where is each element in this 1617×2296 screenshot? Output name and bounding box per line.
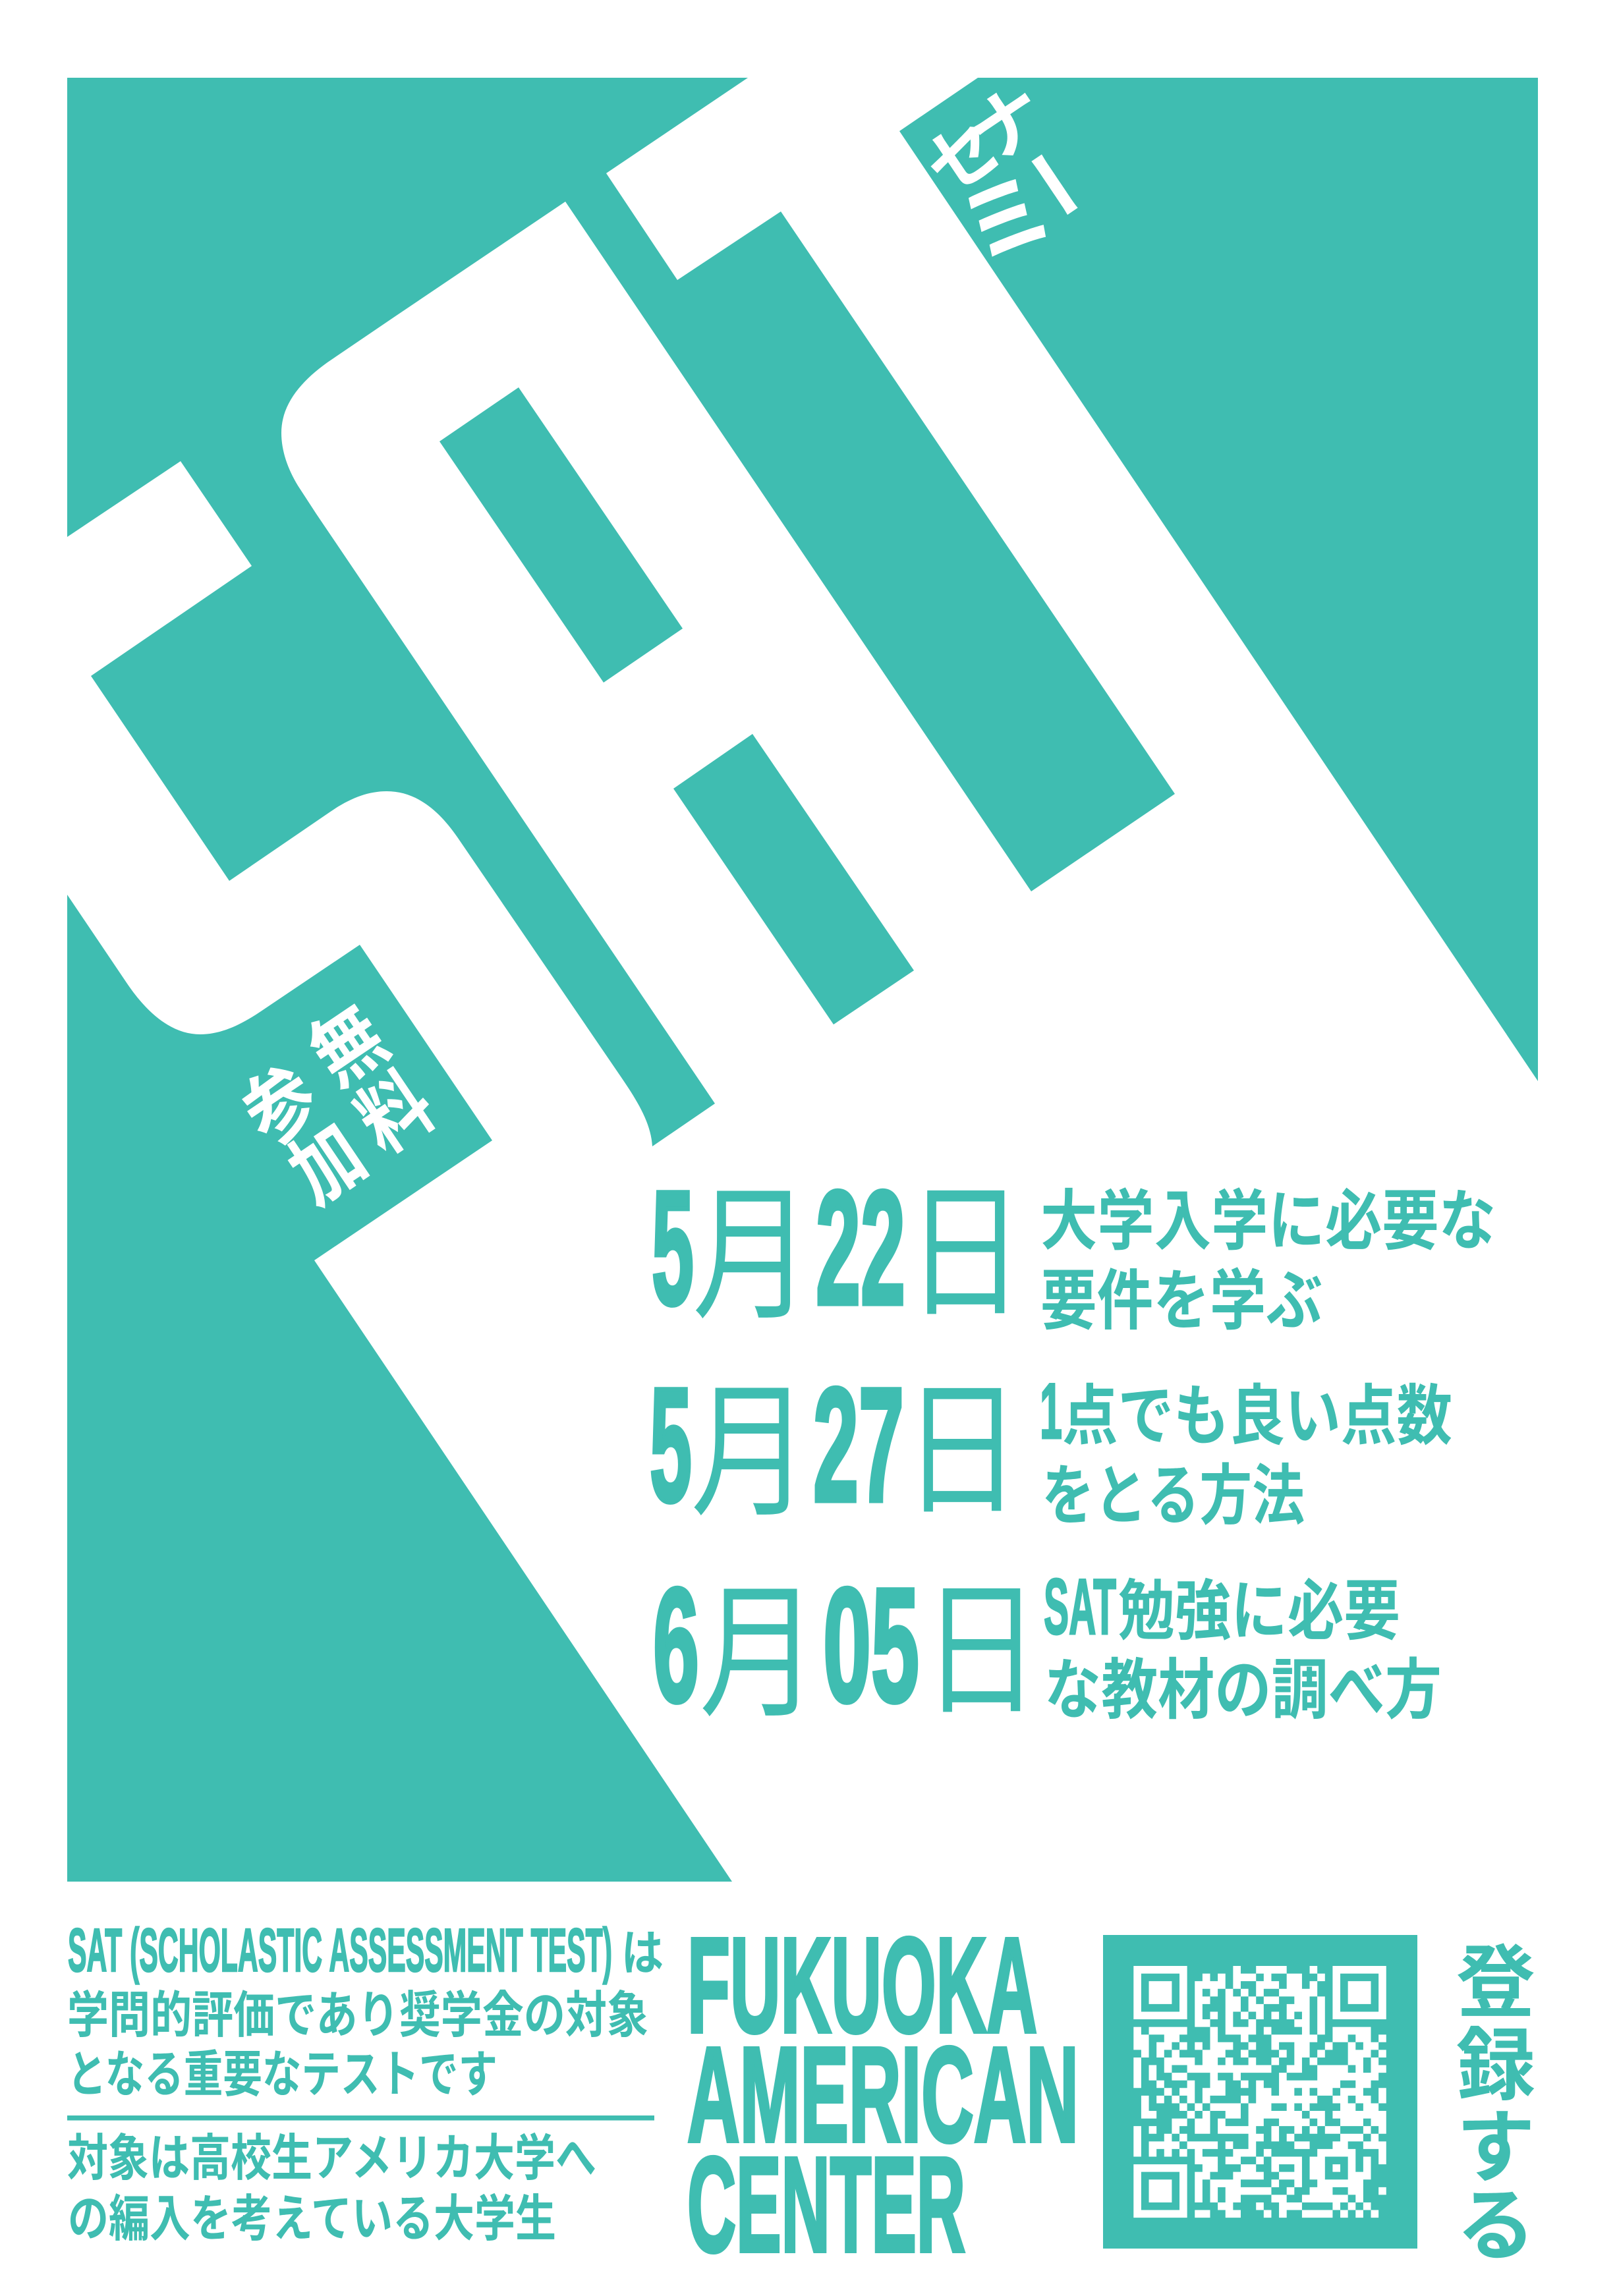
free participation label, rotated: 無 [296, 990, 402, 1102]
topic 2: 点でも良い点数 [1062, 1380, 1452, 1453]
topic 1: 要件を学ぶ [1040, 1264, 1322, 1338]
topic 1: 大学入学に必要な [1040, 1185, 1496, 1258]
panel: A counter lower [673, 734, 914, 1024]
topic 2 [1040, 1367, 1452, 1533]
organiser name: FUKUOKA [687, 1910, 1037, 2061]
description text block: となる重要なテストです [67, 2047, 497, 2103]
date row 1: May 22: 日 [907, 1171, 1024, 1335]
topic 3: SAT [1044, 1563, 1116, 1651]
date row 1: May 22: 月 [693, 1174, 811, 1338]
date row 1: May 22: 5 [652, 1158, 694, 1339]
date row 3: June 05: 日 [922, 1569, 1040, 1733]
date row 3: June 05: 月 [699, 1572, 818, 1736]
date row 2: May 27: 日 [903, 1368, 1021, 1532]
seminar label, rotated: セ [911, 104, 1015, 210]
topic 3 [1044, 1563, 1442, 1727]
seminar label, rotated: ナ [955, 70, 1061, 178]
date row 2: May 27 [650, 1355, 1021, 1536]
call to action: register, vertical: 登 [1456, 1939, 1535, 2027]
date row 1: May 22 [652, 1158, 1024, 1339]
topic 1 [1040, 1185, 1496, 1338]
organiser name: AMERICAN [687, 2019, 1079, 2170]
description text block: 学問的評価であり奨学金の対象 [67, 1988, 648, 2044]
audience text block: 対象は高校生アメリカ大学へ [67, 2131, 596, 2187]
call to action: register, vertical: る [1456, 2182, 1535, 2270]
call to action: register, vertical: 録 [1456, 2022, 1535, 2110]
topic 3: な教材の調べ方 [1044, 1654, 1442, 1727]
panel: upper-left teal area around S and A [67, 78, 1175, 1146]
description text block: SAT (SCHOLASTIC ASSESSMENT TEST) [68, 1916, 612, 1984]
organiser name: CENTER [687, 2129, 965, 2280]
call to action: register, vertical [1456, 1939, 1535, 2270]
poster graphic: diagonal SAT letterforms [67, 78, 1538, 1882]
organiser name [687, 1910, 1079, 2280]
divider [67, 2115, 654, 2120]
QR code [1103, 1935, 1417, 2249]
date row 3: June 05: 05 [823, 1555, 919, 1736]
seminar label, rotated: ー [993, 129, 1110, 244]
seminar label, rotated [911, 70, 1110, 288]
audience text block [67, 2131, 596, 2247]
date row 3: June 05 [653, 1555, 1040, 1736]
date row 3: June 05: 6 [653, 1555, 699, 1736]
topic 3: 勉強に必要 [1118, 1575, 1400, 1648]
panel: A counter upper [440, 387, 683, 683]
free participation label, rotated: 参 [228, 1050, 334, 1162]
topic 2: をとる方法 [1042, 1459, 1305, 1533]
description text block: は [621, 1926, 664, 1980]
seminar label, rotated: ミ [941, 153, 1073, 288]
panel: top-right teal area [899, 78, 1538, 1081]
topic 2: 1 [1040, 1367, 1062, 1455]
call to action: register, vertical: す [1456, 2104, 1535, 2192]
date row 2: May 27: 5 [650, 1355, 692, 1536]
free participation label, rotated [228, 990, 449, 1221]
date row 2: May 27: 月 [691, 1371, 810, 1535]
free participation label, rotated: 加 [275, 1109, 381, 1221]
free participation label, rotated: 料 [343, 1057, 449, 1169]
date row 1: May 22: 22 [816, 1158, 905, 1339]
date row 2: May 27: 27 [813, 1355, 904, 1536]
panel: lower-left teal area [67, 895, 732, 1882]
description text block [67, 1916, 664, 2103]
audience text block: の編入を考えている大学生 [68, 2191, 556, 2247]
